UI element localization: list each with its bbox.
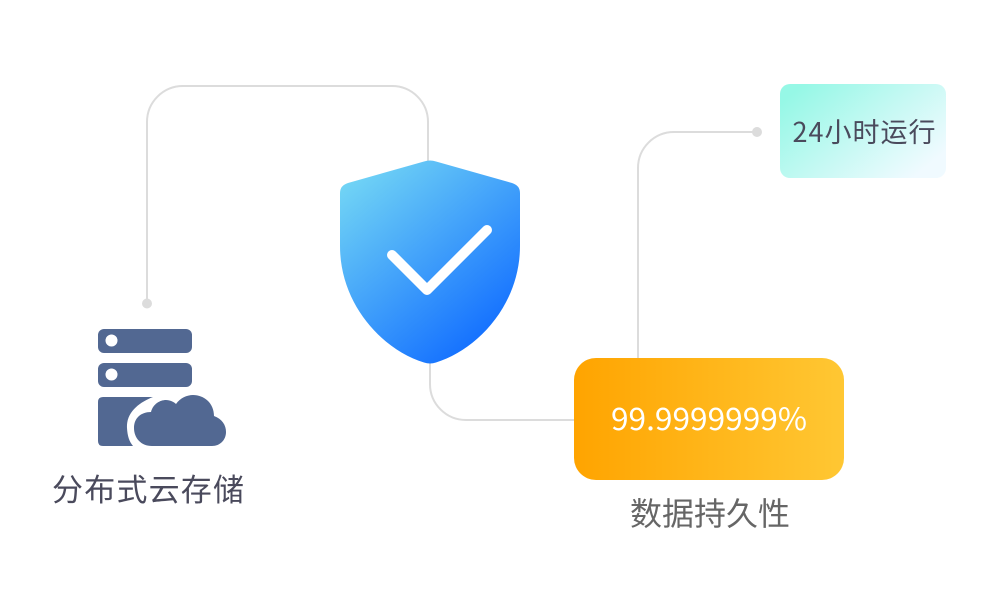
value text: 99.9999999% (611, 394, 807, 439)
label: data durability: 数据持久性 (630, 496, 790, 532)
connector: durability to 24-hour box (638, 127, 762, 360)
card: 24-hour operation (780, 84, 946, 178)
card text: 24小时运行 (792, 111, 936, 150)
label: distributed storage: 分布式云存储 (52, 473, 244, 508)
icon: cloud server (98, 329, 226, 446)
connector: shield to durability (430, 360, 576, 420)
card: durability value (574, 358, 844, 480)
icon: shield with check (340, 160, 520, 364)
check mark (392, 230, 487, 290)
connector: storage to shield (142, 86, 428, 308)
